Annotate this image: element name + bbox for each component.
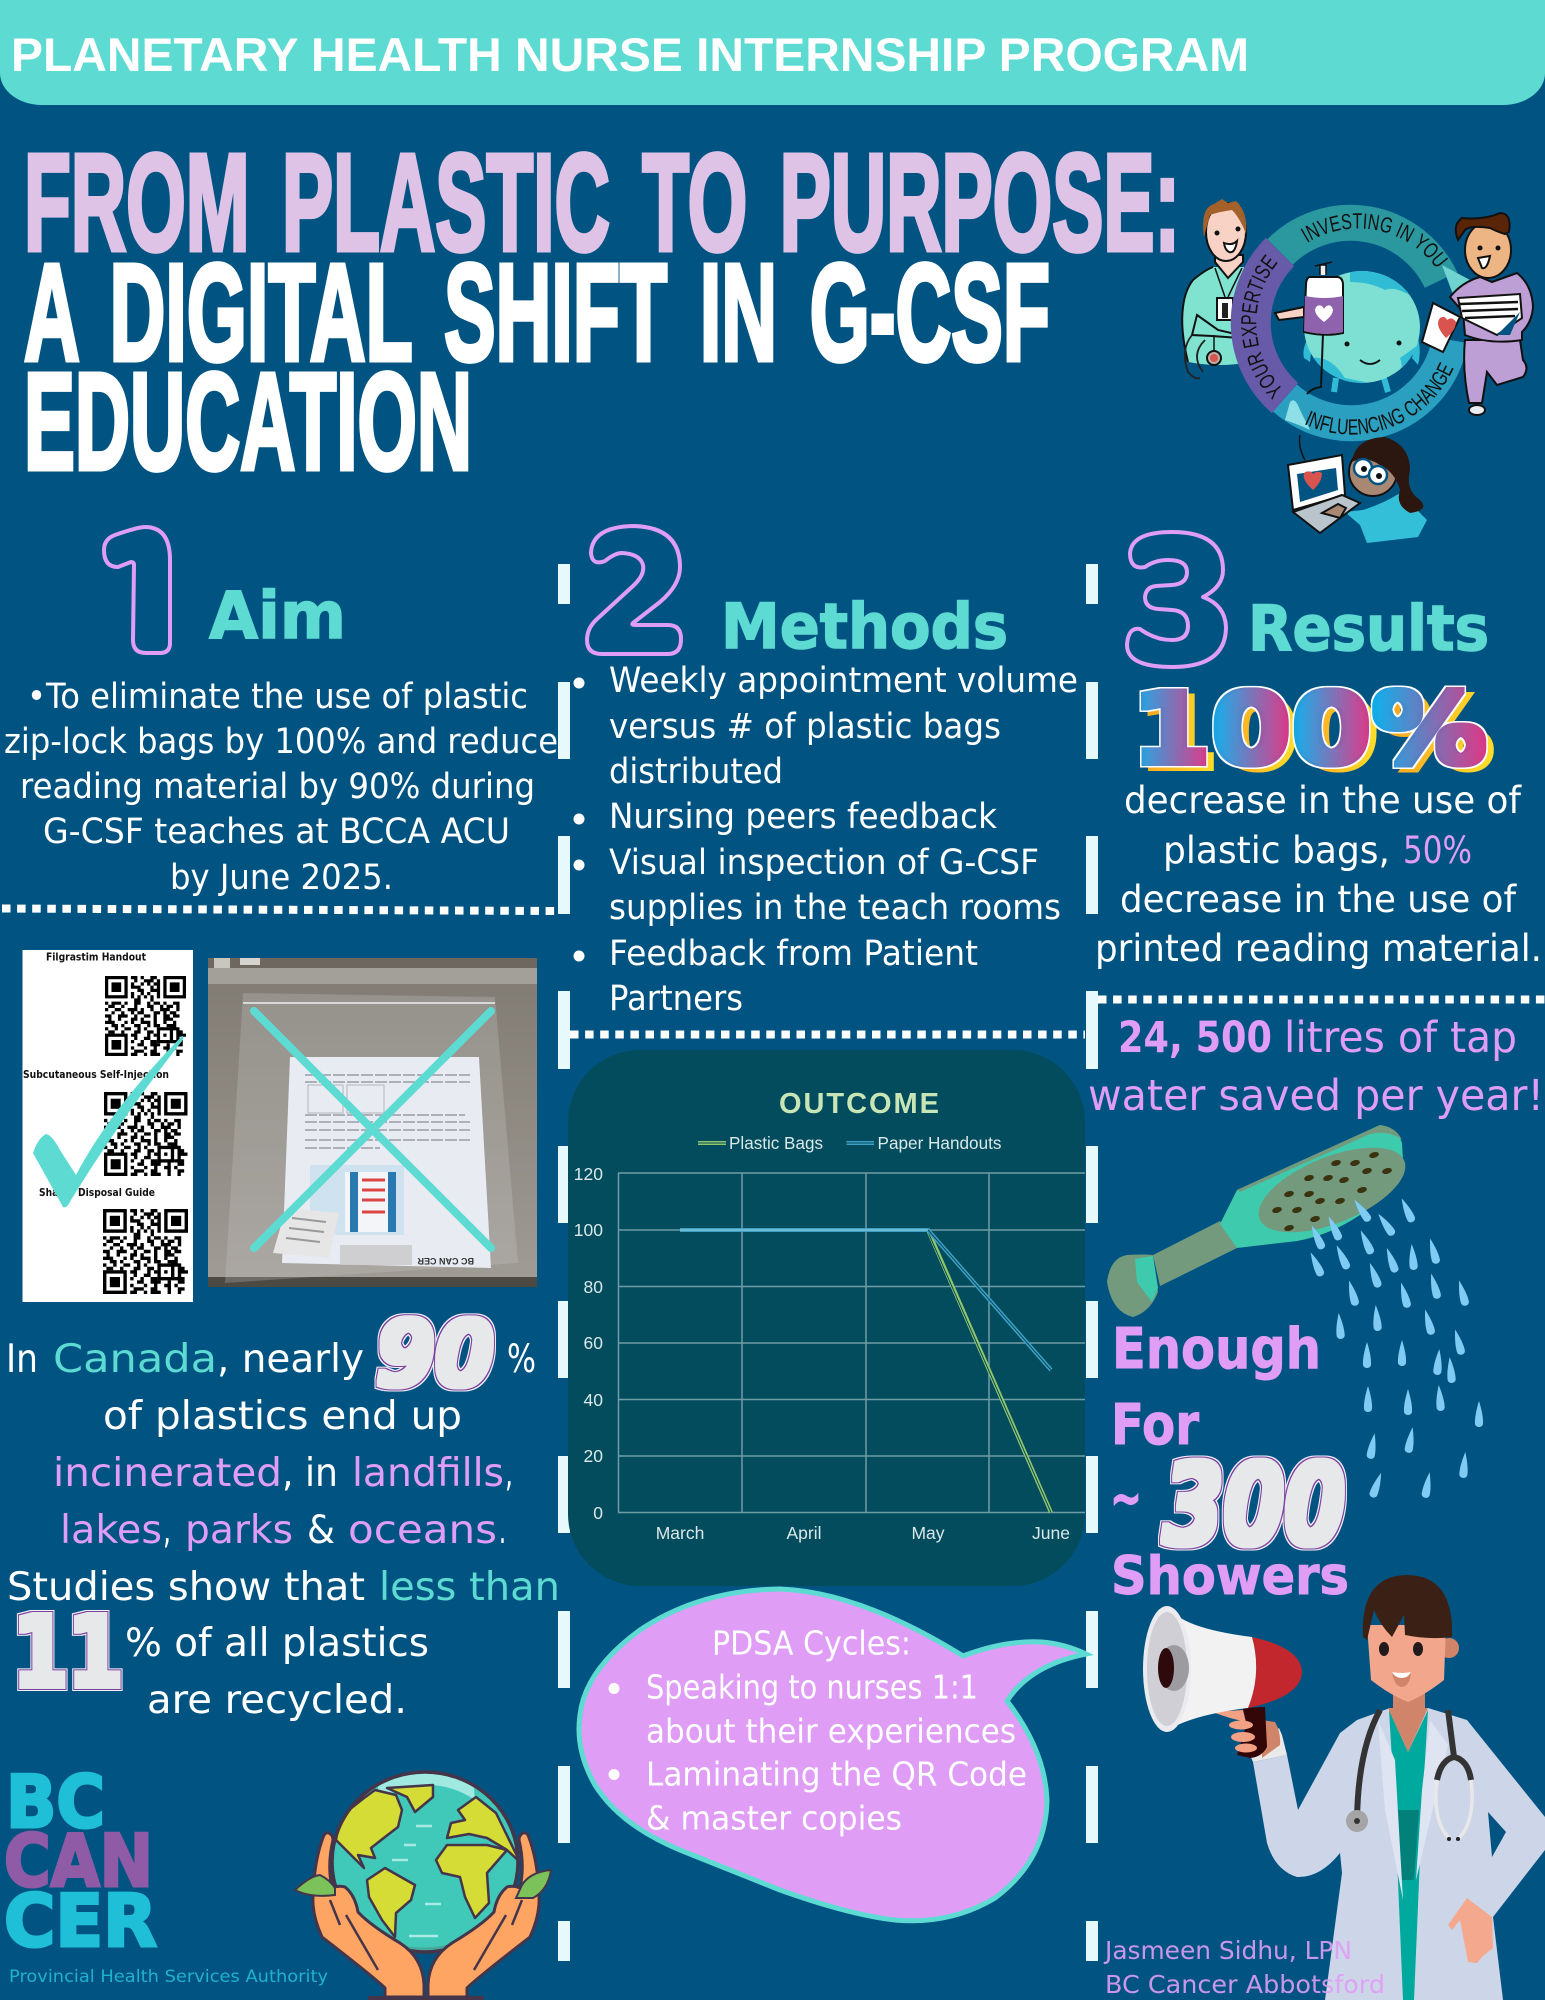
- numeral 1: [104, 527, 170, 653]
- illustration: investing in you ring with nurses and earth: [1181, 199, 1534, 543]
- dotted divider results: [1098, 996, 1545, 1004]
- methods list: versus # of plastic bags: [609, 707, 1001, 747]
- header banner: [0, 0, 1545, 105]
- y axis labels: 20: [584, 1446, 603, 1466]
- x axis labels: [656, 1523, 1070, 1543]
- line chart: outcome: [568, 1050, 1085, 1586]
- doctor hand: [1448, 1898, 1493, 1963]
- left leaf: [295, 1875, 335, 1896]
- text block: enough for 300 showers: [1110, 1317, 1349, 1607]
- text block: enough for 300 showers: Showers: [1111, 1546, 1349, 1607]
- ring text: your expertise: YOUR EXPERTISE: [1241, 254, 1281, 400]
- text block: plastics facts: In: [6, 1337, 38, 1382]
- callout: PDSA cycles speech bubble: [579, 1589, 1086, 1921]
- series: plastic bags: [680, 1230, 1051, 1512]
- methods list: Visual inspection of G-CSF: [609, 843, 1039, 883]
- y axis labels: 120: [574, 1164, 603, 1184]
- vertical dashed divider right: [1086, 564, 1098, 1961]
- nurse left: [1182, 199, 1250, 378]
- aim text: [4, 677, 558, 898]
- scrubs: [1389, 1710, 1428, 2000]
- text block: plastics facts: , nearly: [217, 1337, 364, 1382]
- results text: plastic bags,: [1163, 829, 1390, 872]
- text block: water saved: litres of tap: [1284, 1013, 1517, 1063]
- QR code 2: [104, 1094, 188, 1174]
- aim text: by June 2025.: [170, 858, 393, 898]
- left hand: [313, 1833, 424, 1997]
- runner with books: [1422, 213, 1533, 415]
- right hand: [428, 1833, 539, 1997]
- dotted divider methods: [570, 1030, 1085, 1038]
- methods list: Partners: [609, 979, 743, 1019]
- text block: plastics facts: ,: [505, 1451, 513, 1496]
- icon: cross mark: [254, 1011, 491, 1248]
- big stat 100 percent: 100%: [1131, 673, 1487, 787]
- icon: globe held in hands: [295, 1766, 551, 2000]
- methods list: Nursing peers feedback: [609, 797, 998, 837]
- chart title: OUTCOME: [779, 1088, 939, 1120]
- panel: aim: [4, 527, 558, 898]
- results text: [1095, 779, 1542, 970]
- y axis labels: 0: [593, 1503, 603, 1523]
- text block: plastics facts: ,: [163, 1508, 171, 1553]
- dotted divider aim: [2, 908, 555, 911]
- author credit: Jasmeen Sidhu, LPN: [1103, 1936, 1352, 1965]
- stethoscope: [1346, 1710, 1472, 1841]
- methods list: Feedback from Patient: [609, 934, 978, 974]
- x axis labels: April: [786, 1523, 822, 1543]
- BC Cancer logo: BC: [6, 1760, 105, 1844]
- aim text: G-CSF teaches at BCCA ACU: [43, 812, 510, 852]
- photo: plastic bag crossed out: BC CAN CER: [417, 1256, 474, 1266]
- big stat 100 percent: 100%: [1138, 678, 1494, 792]
- author credit: BC Cancer Abbotsford: [1105, 1970, 1385, 1999]
- panel: results: [1095, 532, 1542, 970]
- x axis labels: June: [1032, 1523, 1070, 1543]
- QR code handout card: Filgrastim Handout: [46, 952, 146, 964]
- icon: shower head: [1107, 1125, 1483, 1499]
- QR code 3: [103, 1211, 188, 1292]
- doctor head: [1363, 1575, 1459, 1715]
- text block: enough for 300 showers: For: [1111, 1393, 1199, 1458]
- text block: water saved: 24, 500: [1118, 1013, 1272, 1063]
- program name: PLANETARY HEALTH NURSE INTERNSHIP PROGRAM: [11, 29, 1249, 82]
- results text: 50%: [1403, 829, 1472, 872]
- text block: plastics facts: oceans: [348, 1508, 497, 1553]
- text block: plastics facts: % of all plastics: [125, 1621, 429, 1666]
- title: EDUCATION: [24, 345, 472, 499]
- big number 11: 11: [13, 1596, 123, 1709]
- heading results: Results: [1248, 592, 1489, 665]
- text block: enough for 300 showers: Enough: [1112, 1317, 1321, 1382]
- methods list: supplies in the teach rooms: [609, 888, 1061, 928]
- QR code 1: [105, 978, 186, 1054]
- methods list: Weekly appointment volume: [609, 661, 1078, 701]
- chart legend: [698, 1133, 1002, 1153]
- chart grid: [618, 1173, 1085, 1512]
- y axis labels: 60: [584, 1333, 603, 1353]
- big number 300: 300: [1163, 1441, 1345, 1571]
- numeral 3: [1127, 532, 1226, 667]
- smiling earth: [1303, 270, 1425, 392]
- ring text: investing in you: INVESTING IN YOU: [1300, 213, 1448, 266]
- text block: plastics facts: are recycled.: [147, 1678, 407, 1723]
- text block: plastics facts: less than: [379, 1565, 560, 1610]
- aim text: reading material by 90% during: [20, 767, 535, 807]
- aim text: •To eliminate the use of plastic: [27, 677, 528, 717]
- callout: PDSA cycles speech bubble: & master copies: [646, 1798, 902, 1838]
- text block: plastics facts: %: [507, 1337, 536, 1382]
- callout: PDSA cycles speech bubble: Speaking to nurses 1:1: [646, 1668, 978, 1706]
- y axis labels: 40: [584, 1390, 603, 1410]
- methods list: distributed: [609, 752, 783, 792]
- QR code handout card: Sharps Disposal Guide: [39, 1187, 155, 1199]
- big number 90: 90: [376, 1302, 494, 1407]
- text block: plastics facts: &: [307, 1508, 335, 1553]
- x axis labels: March: [656, 1523, 704, 1543]
- QR code handout card: Subcutaneous Self-Injection: [23, 1069, 169, 1081]
- text block: plastics facts: parks: [185, 1508, 293, 1553]
- QR code handout card: [22, 950, 193, 1302]
- vertical dashed divider left: [558, 564, 570, 1961]
- x axis labels: May: [911, 1523, 945, 1543]
- text block: plastics facts: lakes: [60, 1508, 162, 1553]
- results text: decrease in the use of: [1124, 779, 1522, 822]
- photo: plastic bag crossed out: [208, 958, 537, 1287]
- IV bag: [1275, 262, 1343, 394]
- text block: enough for 300 showers: ~: [1110, 1466, 1142, 1531]
- person at laptop: [1288, 435, 1427, 543]
- author credit: [1103, 1936, 1385, 1999]
- callout: PDSA cycles speech bubble: Laminating the QR Code: [646, 1754, 1027, 1794]
- methods list: [574, 661, 1078, 1019]
- y axis labels: 80: [584, 1277, 603, 1297]
- BC Cancer logo: CER: [4, 1879, 157, 1963]
- text block: water saved: [1088, 1013, 1544, 1121]
- chart legend: Plastic Bags: [729, 1133, 823, 1153]
- text block: plastics facts: Canada: [53, 1337, 217, 1382]
- water drops: [1307, 1197, 1483, 1499]
- text block: plastics facts: Studies show that: [7, 1565, 365, 1610]
- panel: methods: [574, 526, 1078, 1019]
- BC Cancer logo: [4, 1760, 328, 1987]
- callout: PDSA cycles speech bubble: about their experiences: [646, 1712, 1016, 1750]
- heading methods: Methods: [721, 590, 1008, 663]
- y axis labels: [574, 1164, 603, 1523]
- series: paper handouts: [680, 1230, 1051, 1370]
- aim text: zip-lock bags by 100% and reduce: [4, 722, 558, 762]
- text block: plastics facts: [6, 1302, 560, 1723]
- text block: plastics facts: of plastics end up: [103, 1394, 462, 1439]
- BC Cancer logo: CAN: [4, 1819, 153, 1903]
- ring text: influencing change: INFLUENCING CHANGE: [1305, 362, 1454, 435]
- text block: plastics facts: , in: [282, 1451, 338, 1496]
- globe: [330, 1766, 520, 1960]
- text block: plastics facts: .: [499, 1508, 506, 1553]
- results text: printed reading material.: [1095, 927, 1542, 970]
- results text: decrease in the use of: [1120, 878, 1517, 921]
- title: [24, 126, 1180, 499]
- ring: [1230, 204, 1470, 442]
- right leaf: [516, 1870, 551, 1898]
- text block: plastics facts: landfills: [352, 1451, 504, 1496]
- numeral 2: [587, 526, 681, 654]
- logo tagline: Provincial Health Services Authority: [9, 1967, 328, 1987]
- illustration: doctor with megaphone: [1143, 1575, 1545, 2000]
- icon: check mark: [33, 1036, 184, 1207]
- y axis labels: 100: [574, 1220, 603, 1240]
- chart legend: Paper Handouts: [878, 1133, 1002, 1153]
- doctor coat: [1253, 1708, 1545, 2000]
- callout: PDSA cycles speech bubble: PDSA Cycles:: [712, 1624, 911, 1662]
- text block: plastics facts: incinerated: [53, 1451, 282, 1496]
- megaphone: [1143, 1606, 1302, 1762]
- heading aim: Aim: [209, 579, 346, 654]
